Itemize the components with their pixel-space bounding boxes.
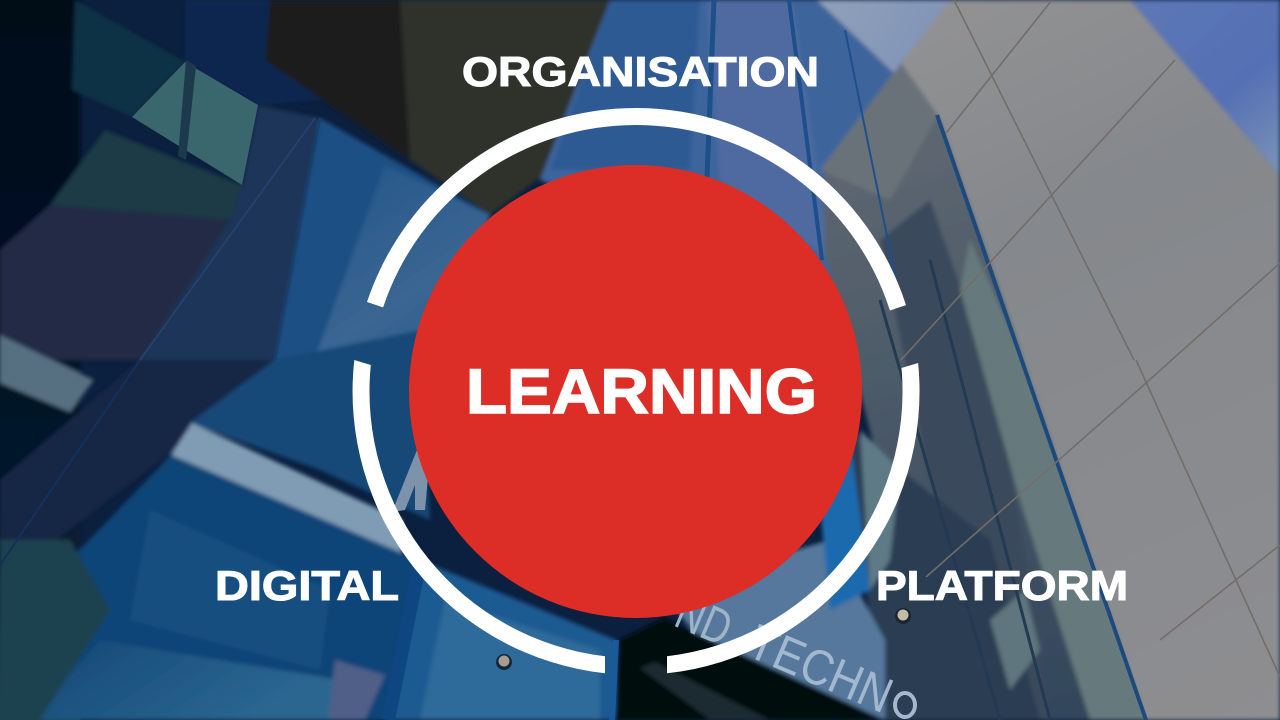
centre circle	[409, 165, 862, 618]
label: platform: PLATFORM	[876, 562, 1128, 609]
label: digital: DIGITAL	[215, 562, 399, 609]
label: organisation: ORGANISATION	[462, 48, 819, 95]
ring: segmented white circle	[353, 108, 920, 673]
centre label: LEARNING	[466, 357, 817, 427]
lamps	[496, 608, 911, 670]
building letter fragment	[392, 450, 430, 512]
concrete panel joints	[901, 0, 1280, 677]
arc: left	[353, 360, 605, 673]
window: teal reflection	[132, 62, 258, 185]
building lettering	[668, 584, 915, 720]
arc: right	[667, 363, 920, 673]
arc: top	[367, 108, 906, 310]
building lettering: ND	[668, 584, 740, 657]
